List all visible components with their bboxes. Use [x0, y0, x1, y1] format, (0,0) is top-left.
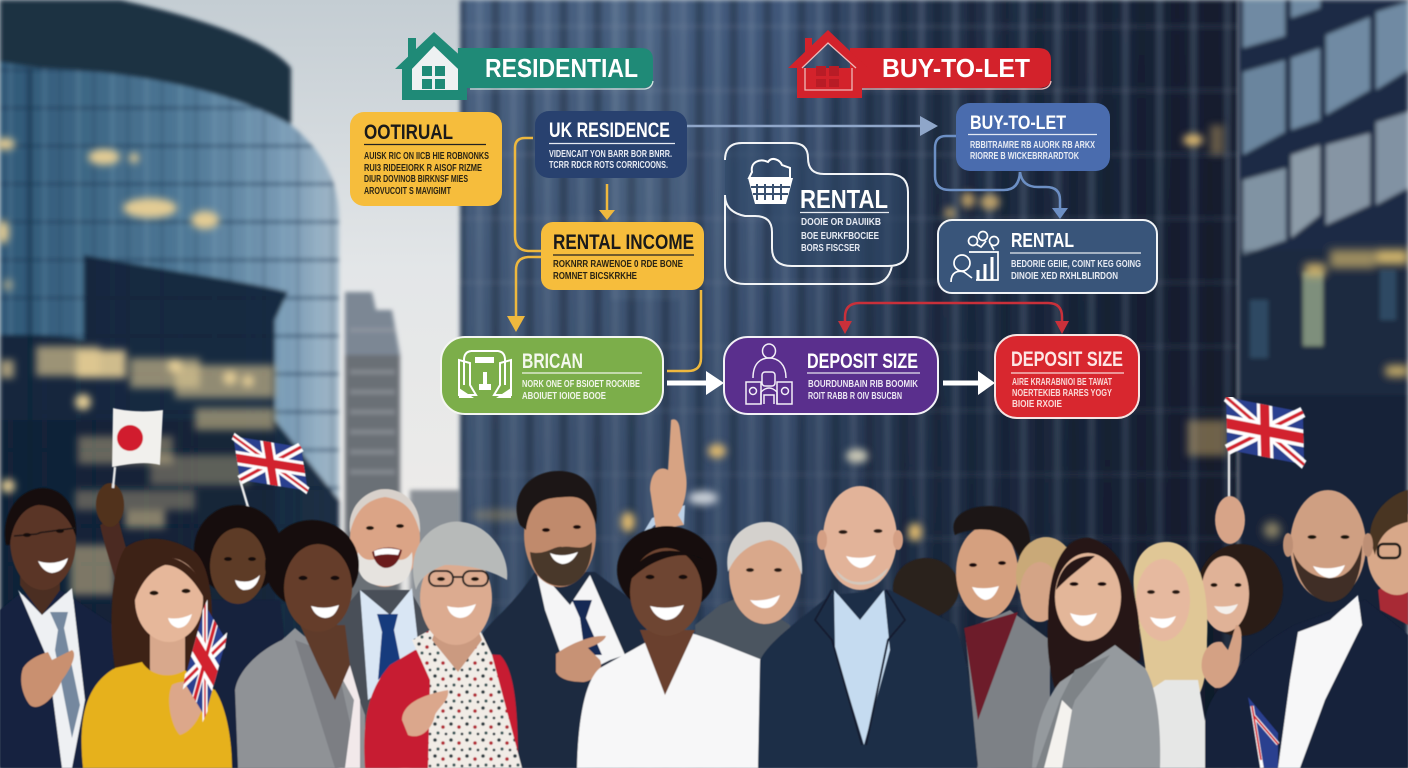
arrow: yellow down to green panel — [507, 257, 541, 332]
UK flag right with hand — [1215, 397, 1304, 544]
heading: Residential — [395, 32, 653, 100]
UK flag left — [233, 436, 308, 507]
panel: yellow Ootirual: RUI3 RIDEEIORK R AISOF RIZME — [364, 162, 482, 174]
person: man in navy suit with hand up — [478, 419, 687, 768]
person: woman in white shirt centre — [577, 526, 794, 768]
person: bearded older man — [330, 489, 430, 768]
panel: Buy-to-Let blue: RIORRE B WICKEBRRARDTOK — [970, 150, 1079, 162]
curved glass tower — [0, 0, 339, 768]
heading: Buy-to-Let: BUY-TO-LET — [882, 53, 1030, 83]
right office tower — [1238, 0, 1408, 768]
icon: green house — [395, 32, 475, 100]
panel: Rental outlined folder: BOE EURKFBOCIEE — [801, 230, 879, 242]
panel: yellow Ootirual: AROVUCOIT S MAVIGIMT — [364, 185, 451, 197]
panel: green Brican — [441, 337, 663, 414]
panel: red Deposit Size — [995, 335, 1139, 418]
warm tower lights — [0, 138, 275, 595]
panel: purple Deposit Size — [724, 337, 938, 414]
small UK flag at pocket — [1248, 697, 1278, 768]
panel: UK Residence: TCRR RDCR ROTS CORRICOONS. — [549, 159, 668, 171]
heading: Residential: RESIDENTIAL — [485, 53, 638, 83]
heading: Buy-to-Let — [788, 30, 1051, 98]
panel: Rental Income: ROMNET BICSKRKHE — [553, 270, 637, 282]
panel: yellow Ootirual: DIUR DOVINOB BIRKNSF MIES — [364, 173, 468, 185]
panel: Buy-to-Let blue: BUY-TO-LET — [970, 113, 1066, 134]
person: older man in navy suit front — [758, 486, 977, 768]
panel: Rental Income: RENTAL INCOME — [553, 231, 694, 254]
person: far left man — [0, 488, 113, 768]
arrow: white to purple panel — [667, 371, 724, 395]
panel: Rental right: BEDORIE GEIIE, COINT KEG GOING — [1011, 258, 1141, 270]
back raised arm with Japanese flag — [96, 408, 163, 590]
panel: UK Residence: UK RESIDENCE — [549, 119, 670, 142]
panel: green Brican: BRICAN — [522, 350, 583, 373]
central office tower — [460, 0, 1238, 768]
person: Asian woman in grey blazer — [1032, 538, 1160, 768]
panel: Rental right — [938, 220, 1157, 293]
arrow: yellow bracket from UK Residence — [515, 138, 541, 251]
person: blonde woman background — [1016, 537, 1076, 622]
arrow: blue bracket to Rental — [935, 136, 1068, 219]
arrow: yellow down to Rental Income — [599, 184, 615, 220]
arrow: blue to Buy-to-Let — [687, 116, 938, 136]
panel: Rental outlined folder: DOOIE OR DAUIIKB — [801, 216, 881, 228]
distant tower — [345, 292, 460, 768]
icon: person with bag — [746, 344, 792, 404]
panel: green Brican: NORK ONE OF BSIOET ROCKIBE — [522, 378, 640, 390]
panel: red Deposit Size: NOERTEKIEB RARES YOGY — [1012, 387, 1112, 399]
panel: purple Deposit Size: ROIT RABB R OIV BSUCBN — [808, 390, 902, 402]
person: woman with curly hair at back — [194, 505, 300, 768]
arrow: white to red panel — [943, 371, 995, 395]
icon: basket — [748, 159, 793, 204]
crowd of people — [0, 397, 1408, 768]
panel: Rental outlined folder: RENTAL — [800, 184, 888, 214]
panel: Rental Income: ROKNRR RAWENOE 0 RDE BONE — [553, 258, 683, 270]
person: dark-haired woman background — [1197, 544, 1283, 636]
person: young man with dark curly hair — [953, 506, 1050, 768]
panel: yellow Ootirual: OOTIRUAL — [364, 121, 453, 144]
panel: green Brican: ABOIUET IOIOE BOOE — [522, 390, 606, 402]
person: woman in grey blazer — [235, 520, 365, 768]
panel: yellow Ootirual: AUISK RIC ON IICB HIE ROBNONKS — [364, 150, 489, 162]
panel: red Deposit Size: BIOIE RXOIE — [1012, 398, 1062, 410]
arrow: red double-headed — [838, 303, 1069, 334]
panel: Rental right: RENTAL — [1011, 230, 1074, 252]
panel: purple Deposit Size: DEPOSIT SIZE — [807, 350, 918, 373]
panel: UK Residence — [535, 111, 687, 178]
panel: purple Deposit Size: BOURDUNBAIN RIB BOOMIK — [808, 378, 918, 390]
icon: people chart — [951, 232, 998, 282]
panel: Rental outlined folder — [725, 143, 908, 284]
icon: luggage box — [459, 351, 511, 398]
panel: UK Residence: VIDENCAIT YON BARR BOR BNRR. — [549, 148, 672, 160]
panel: Rental outlined folder: BORS FISCSER — [801, 242, 860, 254]
person: blonde woman — [1133, 542, 1213, 768]
panel: Rental right: DINOIE XED RXHLBLIRDON — [1011, 270, 1118, 282]
panel: red Deposit Size: AIRE KRARABNIOI BE TAWAT — [1012, 376, 1112, 388]
arrow: yellow connector to green panel — [667, 290, 701, 371]
panel: red Deposit Size: DEPOSIT SIZE — [1011, 348, 1123, 371]
panel: Buy-to-Let blue: RBBITRAMRE RB AUORK RB ARKX — [970, 139, 1095, 151]
person: older man behind centre — [695, 522, 802, 768]
panel: Buy-to-Let blue — [956, 103, 1110, 171]
person: far right man with glasses — [1367, 490, 1408, 625]
icon: red house — [788, 30, 868, 98]
panel: Rental Income — [541, 222, 704, 290]
person: grey-haired woman in red cardigan — [364, 522, 522, 768]
person: bald man in navy suit — [1202, 490, 1408, 768]
person: dark hair background — [893, 558, 959, 618]
central tower lights — [472, 125, 1227, 541]
person: woman in yellow top with flag — [82, 539, 232, 768]
panel: yellow Ootirual — [350, 112, 502, 206]
